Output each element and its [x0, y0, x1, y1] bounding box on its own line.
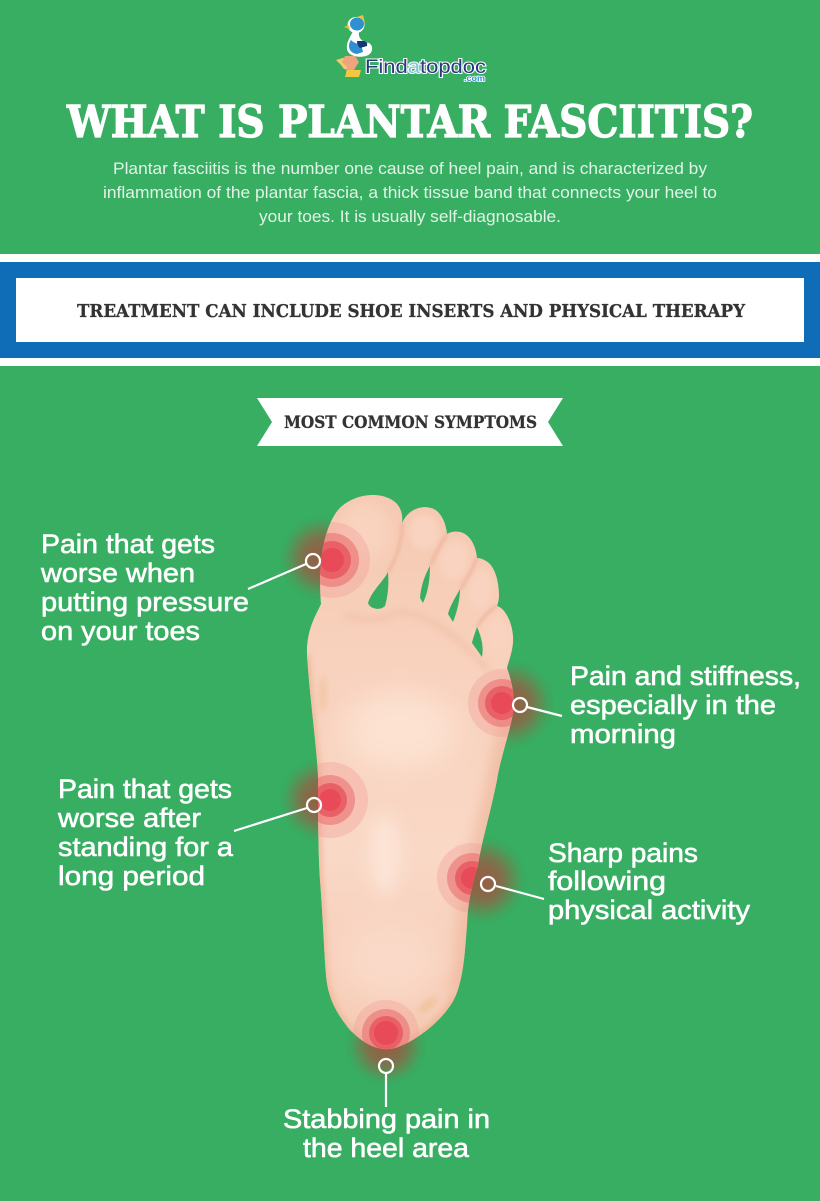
callout: standing: Pain that gets: [58, 774, 232, 804]
callout: standing: worse after: [57, 803, 201, 833]
ribbon: most common symptoms: [257, 398, 563, 446]
foot shading: [307, 502, 513, 1049]
callout: standing: long period: [58, 861, 205, 891]
callout: heel: the heel area: [303, 1133, 470, 1163]
callout: toes: on your toes: [41, 616, 200, 646]
toe gaps: [368, 566, 483, 657]
hotspot: outer midfoot: [437, 843, 482, 912]
callout: toes: Pain that gets: [41, 529, 215, 559]
logo: Findatopdoc: [336, 15, 486, 83]
toe creases: [388, 523, 402, 572]
intro text block: [103, 159, 717, 226]
hotspot: big toe: [320, 522, 370, 598]
intro text block: your toes. It is usually self-diagnosable.: [259, 207, 561, 226]
callout: physical activity: physical activity: [548, 895, 751, 925]
toe pads: [342, 496, 386, 550]
treatment heading: TREATMENT CAN INCLUDE SHOE INSERTS AND PHYSICAL THERAPY: [77, 301, 746, 322]
callout: physical activity: following: [548, 866, 666, 896]
callout: morning stiffness: morning: [570, 719, 676, 749]
title: WHAT IS PLANTAR FASCIITIS?: [66, 97, 753, 148]
foot illustration: [307, 495, 514, 1049]
ribbon: most common symptoms: MOST COMMON SYMPTOMS: [284, 413, 537, 433]
foot silhouette: [307, 495, 514, 1049]
hotspot: arch: [317, 762, 368, 838]
hotspot: outer ball of foot: [468, 669, 514, 737]
icon: duck mascot: [336, 15, 372, 77]
callout: heel: Stabbing pain in: [283, 1104, 490, 1134]
logo wordmark: Find atopdoc: [365, 57, 486, 78]
intro text block: inflammation of the plantar fascia, a thick tissue band that connects your heel to: [103, 183, 717, 202]
callout: morning stiffness: especially in the: [570, 690, 776, 720]
callout: physical activity: [481, 838, 751, 925]
callout: heel: [283, 1059, 490, 1163]
intro text block: Plantar fasciitis is the number one cause of heel pain, and is characterized by: [113, 159, 708, 178]
hotspot glows on background: [282, 518, 552, 1083]
callout: toes: [40, 529, 320, 646]
callout: physical activity: Sharp pains: [548, 838, 698, 868]
callout: standing: standing for a: [58, 832, 234, 862]
callout: toes: putting pressure: [41, 587, 249, 617]
callout: standing: [57, 774, 321, 891]
logo .com: .com: [464, 74, 485, 83]
callout: toes: worse when: [40, 558, 195, 588]
callout: morning stiffness: [513, 661, 801, 749]
callout: morning stiffness: Pain and stiffness,: [570, 661, 801, 691]
panel: treatment banner: [0, 254, 820, 366]
highlights: [345, 692, 455, 768]
hotspot: heel: [353, 1000, 419, 1050]
